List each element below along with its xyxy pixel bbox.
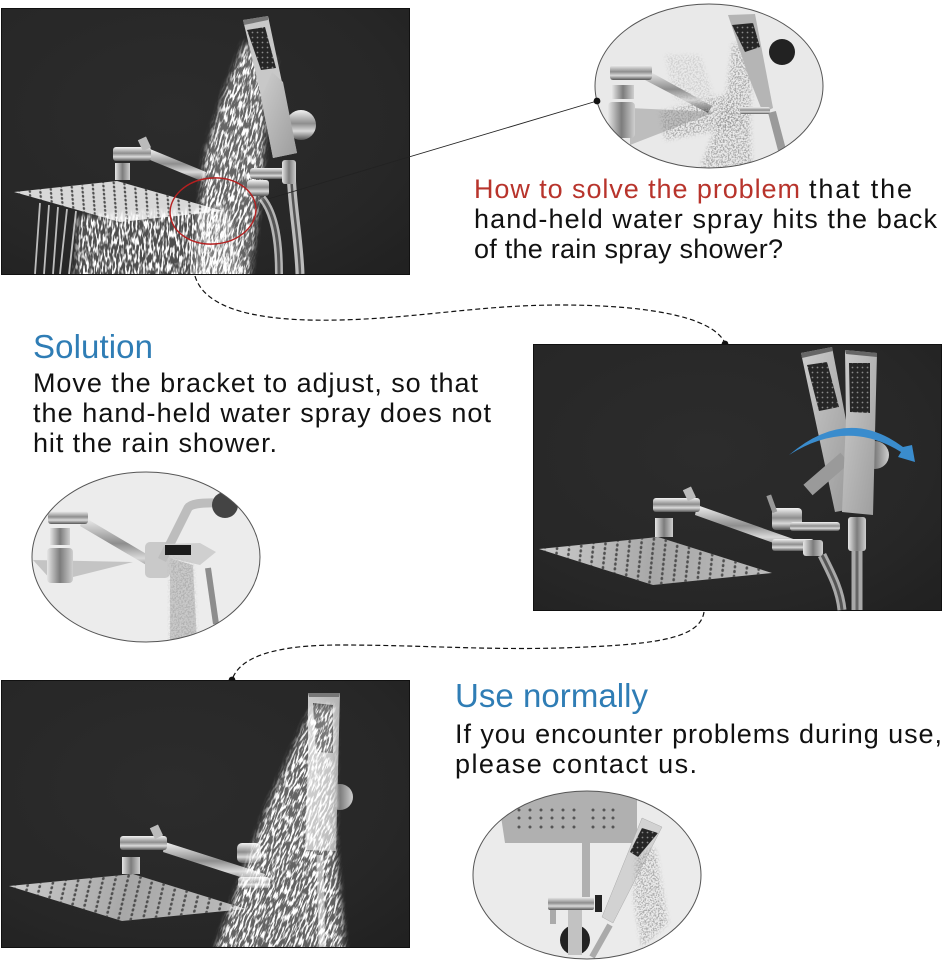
hose — [772, 112, 782, 150]
panel: problem photo — [1, 8, 410, 275]
hand spray — [212, 702, 350, 947]
use normally text: please contact us. — [455, 749, 697, 779]
hoses — [822, 550, 857, 610]
wall mount — [212, 492, 238, 518]
zoomed circle: problem — [594, 4, 823, 168]
swivel — [610, 65, 652, 80]
left tilted hand shower — [801, 347, 846, 512]
right hand shower — [842, 350, 877, 515]
question text continued: that the — [809, 174, 912, 204]
solution text: Move the bracket to adjust, so that — [33, 368, 478, 398]
hand spray — [190, 39, 280, 274]
question text continued: hand-held water spray hits the back — [474, 204, 938, 234]
wall mount — [327, 784, 353, 810]
shower face — [630, 828, 658, 857]
mount stem — [568, 910, 582, 955]
rain head — [539, 537, 772, 585]
wall mount — [286, 110, 316, 140]
overhead rain head — [497, 790, 637, 843]
elbow tube — [808, 458, 845, 490]
base joint — [47, 548, 73, 583]
bracket — [237, 843, 270, 888]
panel: normal use photo — [1, 680, 410, 948]
dashed connector 1 — [195, 276, 728, 347]
rain spray — [70, 204, 246, 274]
shower arm — [120, 824, 265, 884]
question text continued: of the rain spray shower? — [474, 234, 783, 264]
heading: Use normally: Use normally — [455, 677, 648, 714]
rain head side view — [630, 108, 715, 145]
bracket — [247, 160, 296, 196]
swivel — [48, 511, 88, 524]
neck — [612, 85, 634, 99]
arm — [80, 521, 145, 564]
handle elbow — [162, 503, 218, 560]
shower arm — [113, 136, 206, 182]
dashed connector 2 — [229, 612, 704, 683]
rain head — [14, 181, 223, 222]
zoomed circle: solution — [32, 472, 260, 642]
bracket — [548, 897, 594, 910]
red problem circle — [167, 174, 259, 248]
solution text: the hand-held water spray does not — [33, 398, 491, 428]
bracket lever — [550, 910, 556, 924]
base joint — [608, 102, 635, 138]
wall mount — [560, 925, 590, 955]
wall mount — [861, 441, 889, 469]
use normally text — [455, 719, 942, 779]
droplets — [665, 55, 715, 100]
hand shower — [728, 14, 773, 113]
rain head side view — [33, 560, 132, 577]
hand shower — [243, 16, 297, 158]
bracket — [145, 542, 170, 578]
hand shower — [305, 693, 340, 851]
black clamp — [595, 895, 602, 912]
rain head — [9, 874, 246, 921]
water stream — [170, 558, 197, 642]
use normally text: If you encounter problems during use, — [455, 719, 942, 749]
question text continued — [474, 174, 938, 264]
hose — [208, 568, 216, 624]
wall mount — [769, 39, 795, 65]
zoomed circle: normal use — [473, 790, 701, 959]
arm — [645, 70, 712, 113]
neck — [50, 528, 70, 545]
solution text: hit the rain shower. — [33, 428, 277, 458]
callout line to zoomed view — [268, 101, 597, 199]
hand shower end — [164, 543, 216, 565]
bracket — [766, 494, 866, 556]
hand shower — [602, 818, 662, 923]
water stream — [634, 847, 668, 947]
pipe — [582, 843, 590, 898]
shower arm — [653, 486, 799, 551]
problem question text: How to solve the problem — [474, 174, 800, 204]
water splash — [660, 95, 745, 140]
hose — [320, 855, 322, 947]
rain streaks — [35, 203, 76, 274]
panel: adjusted bracket photo — [534, 344, 942, 610]
heading: Solution: Solution — [33, 328, 153, 365]
hose — [592, 925, 610, 957]
water stream — [700, 42, 753, 168]
hoses — [262, 165, 300, 274]
black band — [165, 545, 191, 555]
blue rotation arrow — [789, 428, 915, 462]
solution text — [33, 368, 491, 458]
bracket — [740, 107, 770, 114]
